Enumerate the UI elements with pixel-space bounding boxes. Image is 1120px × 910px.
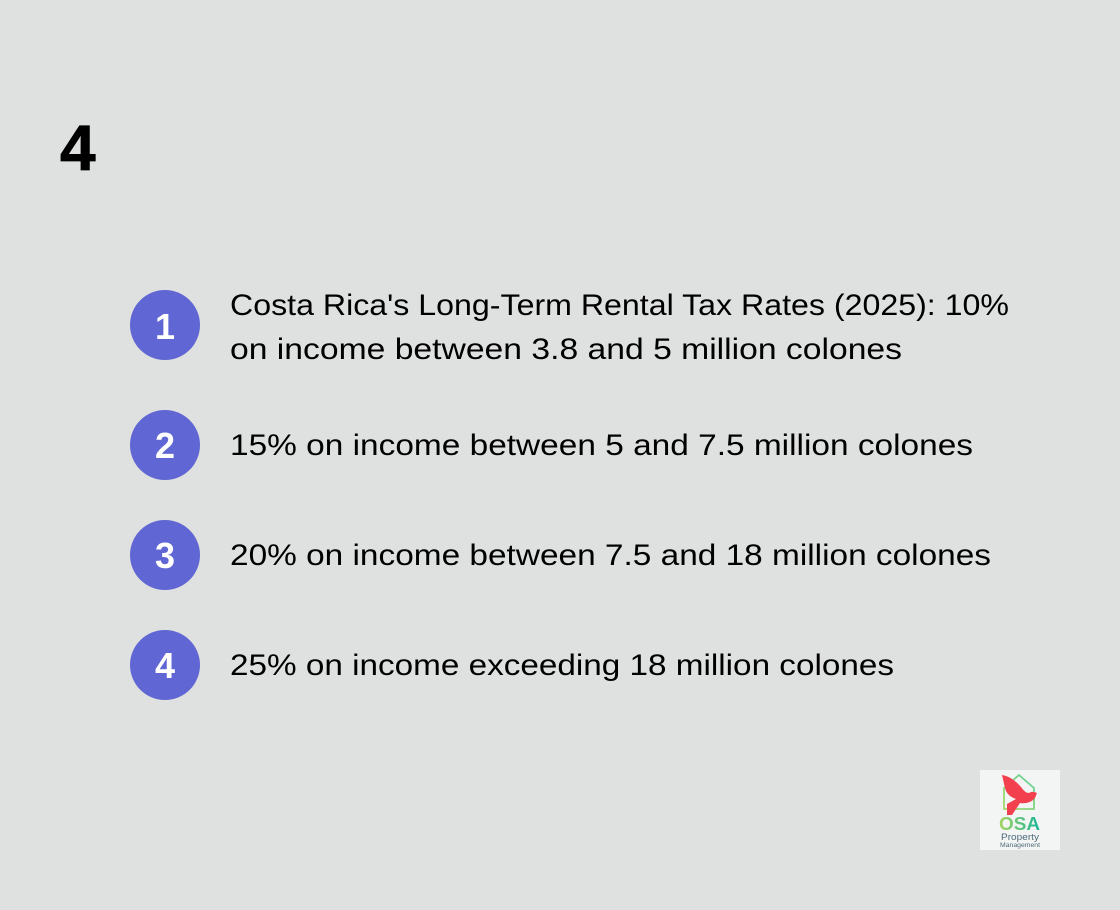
heading: number 4: 4 <box>60 112 96 184</box>
list item 1 <box>130 289 1009 366</box>
badge 4: 4 <box>155 645 175 686</box>
badge 1: 1 <box>155 306 175 347</box>
badge 2: 2 <box>155 425 175 466</box>
list item 3 <box>130 520 991 590</box>
icon: red bird <box>1002 775 1037 815</box>
badge 1 <box>130 290 200 360</box>
item 1 text: on income between 3.8 and 5 million colones <box>230 333 902 366</box>
logo subtitle: Property <box>1001 832 1040 842</box>
list item 4 <box>130 630 894 700</box>
item 1 text: Costa Rica's Long-Term Rental Tax Rates (2025): 10% <box>230 289 1009 322</box>
list item 2 <box>130 410 973 480</box>
logo wordmark: OSA <box>999 814 1040 834</box>
item 3 text: 20% on income between 7.5 and 18 million colones <box>230 539 991 572</box>
icon: house outline <box>1004 775 1034 809</box>
badge 4 <box>130 630 200 700</box>
logo: OSA Property Management <box>980 770 1060 850</box>
badge 3 <box>130 520 200 590</box>
item 4 text: 25% on income exceeding 18 million colones <box>230 649 894 682</box>
badge 3: 3 <box>155 535 175 576</box>
item 1 text <box>230 289 1009 366</box>
logo subtitle line 2: Management <box>1000 842 1040 849</box>
badge 2 <box>130 410 200 480</box>
item 2 text: 15% on income between 5 and 7.5 million colones <box>230 429 973 462</box>
